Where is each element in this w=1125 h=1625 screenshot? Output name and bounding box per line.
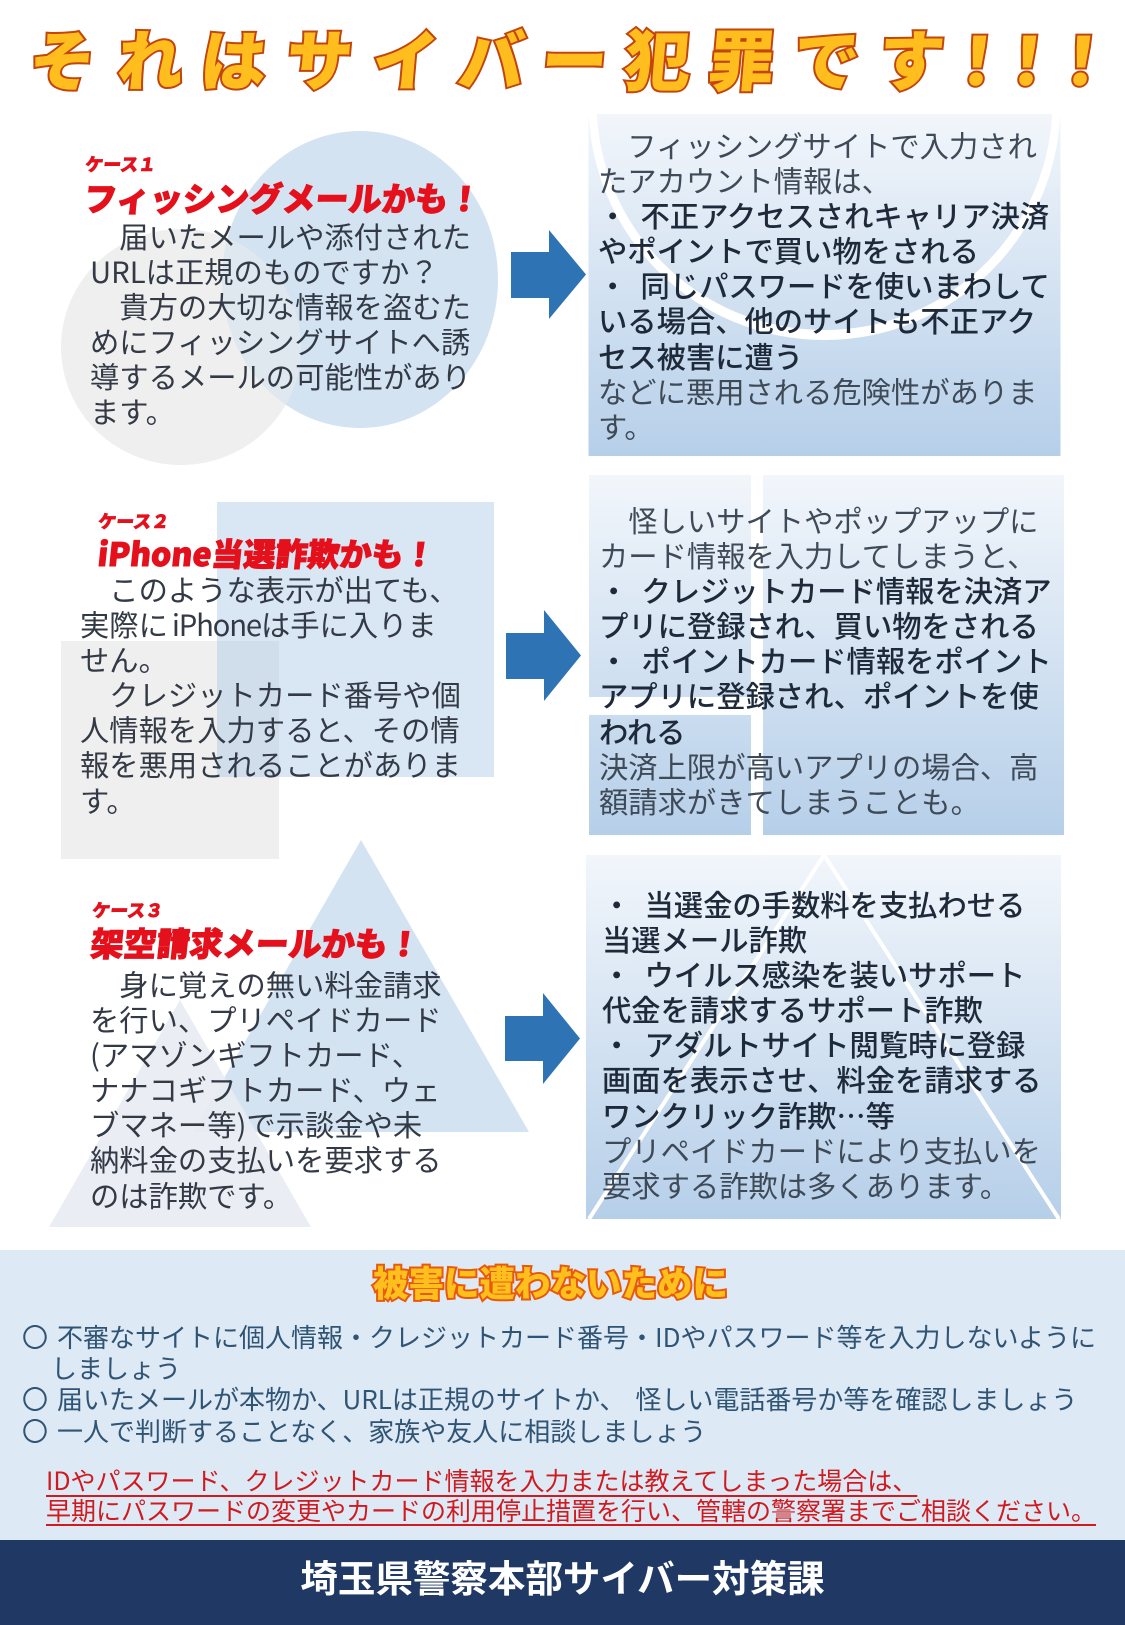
panel: case 1 consequences — [588, 114, 1060, 456]
panel background with triangle outline — [586, 855, 1061, 1219]
consequences text: 怪しいサイトやポップアップに カード情報を入力してしまうと、 ・ クレジットカード情報を決済ア プリに登録され、買い物をされる ・ ポイントカード情報をポイント アプリに登録され、ポイントを使 われる 決済上限が高いアプリの場合、高 額請求がきてしまうことも。 — [599, 499, 1052, 822]
panel: case 3 consequences — [586, 855, 1061, 1219]
panel: case 1 warning — [61, 131, 498, 465]
title: イ — [369, 9, 443, 105]
footer — [0, 1540, 1125, 1625]
title: で — [790, 9, 864, 105]
arrow: case 2 — [506, 610, 581, 701]
title: バ — [455, 9, 529, 105]
panel background with crescent — [588, 114, 1060, 456]
case 1 heading: フィッシングメールかも！ — [82, 172, 484, 221]
consequences text: フィッシングサイトで入力され たアカウント情報は、 ・ 不正アクセスされキャリア決済 やポイントで買い物をされる ・ 同じパスワードを使いまわして いる場合、他のサイトも不正アク セス被害に遭う などに悪用される危険性がありま す。 — [598, 124, 1050, 447]
panel: case 2 consequences — [589, 475, 1064, 835]
title: 罪 — [705, 9, 779, 105]
title — [26, 9, 1119, 105]
prevention heading: 被害に遭わないために — [373, 1256, 728, 1307]
footer: 埼玉県警察本部サイバー対策課 — [300, 1548, 825, 1603]
title: す — [875, 9, 949, 105]
title: は — [197, 9, 271, 105]
case 3 label: ケース３ — [91, 897, 165, 923]
red warning note: IDやパスワード、クレジットカード情報を入力または教えてしまった場合は、 早期にパスワードの変更やカードの利用停止措置を行い、管轄の警察署までご相談ください。 — [46, 1462, 1096, 1528]
case 3 heading: 架空請求メールかも！ — [89, 918, 424, 966]
consequences text: ・ 当選金の手数料を支払わせる 当選メール詐欺 ・ ウイルス感染を装いサポート 代金を請求するサポート詐欺 ・ アダルトサイト閲覧時に登録 画面を表示させ、料金を請求する ワンクリック詐欺…等 プリペイドカードにより支払いを 要求する詐欺は多くあります。 — [602, 883, 1041, 1206]
case 3 body text: 身に覚えの無い料金請求 を行い、プリペイドカード (アマゾンギフトカード、 ナナコギフトカード、ウェ ブマネー等)で示談金や未 納料金の支払いを要求する のは詐欺です。 — [90, 963, 442, 1216]
arrow: case 3 — [505, 993, 580, 1084]
title: ！ — [991, 9, 1065, 105]
background rectangles — [61, 502, 494, 859]
prevention list: 〇 不審なサイトに個人情報・クレジットカード番号・IDやパスワード等を入力しないように しましょう 〇 届いたメールが本物か、URLは正規のサイトか、 怪しい電話番号か等を確認しましょう 〇 一人で判断することなく、家族や友人に相談しましょう — [22, 1318, 1096, 1449]
case 2 body text: このような表示が出ても、 実際にiPhoneは手に入りま せん。 クレジットカード番号や個 人情報を入力すると、その情 報を悪用されることがありま す。 — [80, 568, 461, 821]
title: サ — [283, 9, 357, 105]
panel: case 3 warning — [49, 840, 529, 1227]
title: れ — [114, 9, 188, 105]
title: ！ — [1045, 9, 1119, 105]
background circles — [61, 131, 498, 465]
title: ー — [538, 9, 612, 105]
background triangles — [49, 840, 529, 1227]
case 2 heading: iPhone当選詐欺かも！ — [96, 530, 438, 576]
title: そ — [26, 9, 100, 105]
title: 犯 — [621, 9, 695, 105]
case 1 label: ケース１ — [84, 151, 158, 177]
title: ！ — [941, 9, 1015, 105]
case 1 body text: 届いたメールや添付された URLは正規のものですか？ 貴方の大切な情報を盗むた めにフィッシングサイトへ誘 導するメールの可能性があり ます。 — [90, 215, 471, 432]
case 2 label: ケース２ — [97, 508, 171, 534]
panel background blocks — [589, 475, 1064, 835]
arrow: case 1 — [511, 230, 586, 319]
panel: prevention advice — [0, 1250, 1125, 1540]
panel: case 2 warning — [61, 502, 494, 859]
